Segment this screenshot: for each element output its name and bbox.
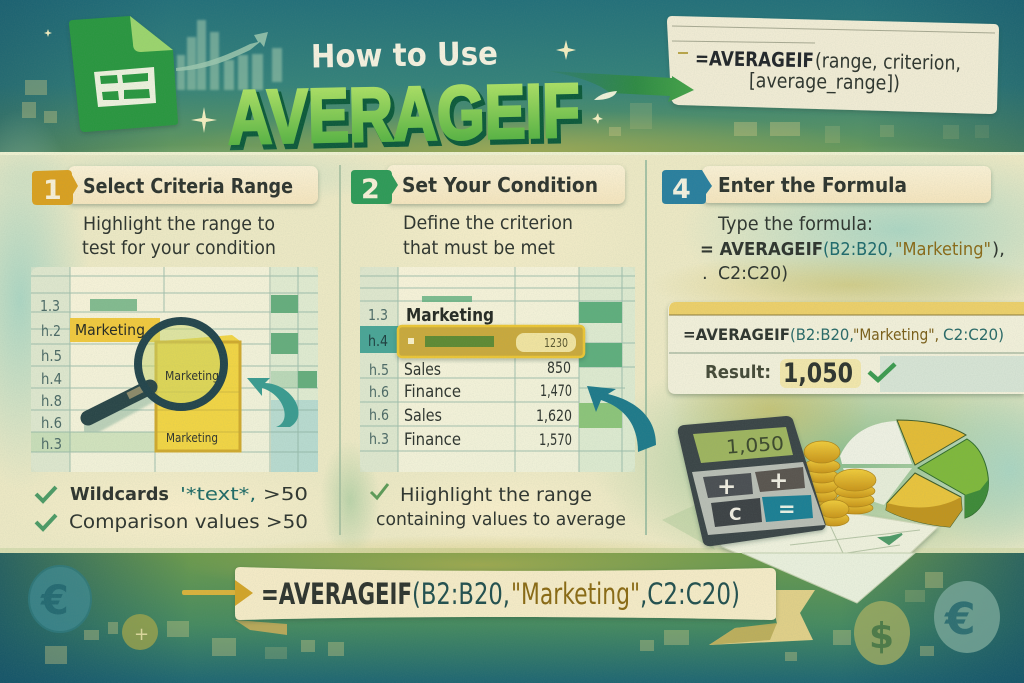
sheet page fold xyxy=(130,16,173,52)
calculator screen xyxy=(693,427,793,463)
Marketing cell text: Marketing xyxy=(75,321,145,339)
formula banner ribbon tails xyxy=(235,590,815,645)
step 1 checklist xyxy=(36,484,308,533)
coin: euro left xyxy=(29,566,91,632)
sheet table glyph xyxy=(94,67,156,107)
step 2 badge xyxy=(351,170,398,204)
step 4 description: . xyxy=(702,263,708,284)
formula banner xyxy=(235,567,776,620)
step 2 heading: Set Your Condition xyxy=(402,173,598,197)
syntax dash xyxy=(678,52,688,54)
row labels: h.6 xyxy=(369,406,389,424)
banner formula text: "Marketing" xyxy=(511,577,640,611)
dark teal curved arrow xyxy=(587,386,656,452)
step 2 spreadsheet illustration xyxy=(360,267,656,472)
step 4 badge xyxy=(662,170,712,204)
coin: dollar right xyxy=(854,601,910,665)
small leaf accent xyxy=(594,91,617,100)
footer background band xyxy=(0,535,1024,683)
category column: Sales xyxy=(404,406,442,426)
Marketing label: Marketing xyxy=(406,305,494,326)
checklist line 1: Hiighlight the range xyxy=(400,484,592,506)
magnifying glass xyxy=(88,321,224,428)
step 2 header xyxy=(351,165,625,205)
magnifier lens tint xyxy=(140,323,222,405)
values column: 1,570 xyxy=(539,430,572,449)
row labels: h.5 xyxy=(41,347,62,365)
column Marketing text: Marketing xyxy=(166,431,218,445)
row label h.4: h.4 xyxy=(368,332,388,350)
syntax line 1: =AVERAGEIF xyxy=(695,46,814,72)
formula in card: (B2:B20, xyxy=(790,325,854,344)
step 1 description xyxy=(82,213,276,259)
category column: Finance xyxy=(404,430,461,450)
step 1 heading: Select Criteria Range xyxy=(83,174,293,198)
category column xyxy=(404,360,461,450)
calculator keypad xyxy=(692,462,825,535)
highlighted condition row: 1230 xyxy=(544,336,568,350)
key plus xyxy=(703,473,753,500)
row labels: h.8 xyxy=(41,392,62,410)
row labels xyxy=(40,297,62,453)
title: AVERAGEIF: AVERAGEIF xyxy=(227,68,581,161)
step 4 heading: Enter the Formula xyxy=(718,173,907,197)
category column: Sales xyxy=(404,360,441,380)
step 2 description: Define the criterion xyxy=(403,212,573,234)
category column: Finance xyxy=(404,382,461,402)
step 4 description xyxy=(700,213,1005,284)
step 4 description: ), xyxy=(992,239,1005,260)
key clear: C xyxy=(729,505,741,525)
result value: 1,050 xyxy=(783,358,853,389)
teal curved arrow xyxy=(247,378,299,427)
step 1 badge xyxy=(32,170,78,205)
row labels: h.4 xyxy=(41,370,62,388)
wildcards values: '*text*, >50 xyxy=(180,484,308,505)
step 4 description: C2:C20) xyxy=(718,263,788,284)
paper sheet under calculator xyxy=(720,513,938,603)
row labels xyxy=(369,361,389,448)
yellow pointer arrow xyxy=(182,580,253,606)
main panel background xyxy=(0,110,1024,580)
comparison item: Comparison values >50 xyxy=(69,511,308,533)
decorative bar chart behind title xyxy=(177,20,282,90)
step 4 header xyxy=(662,166,991,205)
values column xyxy=(536,358,572,449)
row labels: h.5 xyxy=(369,361,389,379)
key equals: = xyxy=(778,497,796,521)
step 1 spreadsheet illustration xyxy=(31,267,318,472)
formula in card: "Marketing", xyxy=(853,325,939,344)
row label 1.3: 1.3 xyxy=(368,306,388,324)
coin: euro right: € xyxy=(944,594,976,645)
result label: Result: xyxy=(705,362,771,383)
row labels: h.6 xyxy=(41,414,62,432)
faint paper left of calculator xyxy=(662,505,715,550)
highlighted condition row xyxy=(398,326,584,357)
step 4 number: 4 xyxy=(672,174,691,205)
chart trend arrow xyxy=(176,32,268,71)
formula in card: =AVERAGEIF xyxy=(683,325,790,344)
pie chart xyxy=(840,420,988,527)
highlighted criteria column xyxy=(155,335,240,451)
key plus: + xyxy=(717,474,736,500)
calculator display value: 1,050 xyxy=(725,433,785,459)
check icon xyxy=(36,515,56,529)
result value pill xyxy=(780,359,861,388)
row labels: h.2 xyxy=(41,322,61,340)
step 4 description: Type the formula: xyxy=(717,213,873,235)
check icon xyxy=(371,484,388,498)
key clear xyxy=(711,498,762,527)
footer paper corner xyxy=(742,553,915,603)
coin: dollar right: $ xyxy=(869,616,894,657)
row labels: h.6 xyxy=(369,383,389,401)
values column: 850 xyxy=(547,358,571,377)
footer decorative squares xyxy=(45,572,943,664)
teal row label cell xyxy=(360,326,398,353)
values column: 1,470 xyxy=(540,381,572,400)
step 4 description: "Marketing" xyxy=(895,239,991,260)
row labels: h.3 xyxy=(369,430,389,448)
key plus: + xyxy=(769,468,788,494)
formula in card: C2:C20) xyxy=(943,325,1004,344)
title: How to Use: How to Use xyxy=(311,34,498,76)
sparkles xyxy=(44,29,603,133)
row labels: h.3 xyxy=(41,435,62,453)
checklist line 2: containing values to average xyxy=(376,509,626,530)
step 1 header xyxy=(32,166,318,206)
coin stacks xyxy=(804,441,876,526)
icon: Google Sheets document xyxy=(69,16,178,132)
banner formula text xyxy=(261,577,740,611)
result check xyxy=(869,364,895,380)
key plus xyxy=(755,467,805,494)
check icon xyxy=(36,487,56,501)
highlighted Marketing row xyxy=(70,318,160,342)
row labels: 1.3 xyxy=(40,297,60,315)
coin: euro left: € xyxy=(40,578,69,624)
step 2 description xyxy=(403,212,573,259)
title: AVERAGEIF: AVERAGEIF xyxy=(230,72,584,165)
syntax line 1: (range, criterion, xyxy=(815,48,961,75)
syntax line 1 xyxy=(695,46,961,75)
header decorative squares xyxy=(22,80,989,143)
coin: euro right xyxy=(934,581,1000,653)
green cell marks xyxy=(90,295,317,388)
coin: small left: + xyxy=(134,624,149,645)
key equals xyxy=(762,495,813,522)
header background band xyxy=(0,0,1024,190)
step 2 checklist xyxy=(371,484,626,530)
values column: 1,620 xyxy=(536,406,572,425)
step 2 description: that must be met xyxy=(403,237,555,259)
formula result card xyxy=(668,302,1024,394)
syntax line 2: [average_range]) xyxy=(749,68,900,95)
banner formula text: (B2:B20, xyxy=(412,577,510,611)
syntax callout box xyxy=(667,16,999,114)
step 1 description: test for your condition xyxy=(82,237,276,259)
coin: small left xyxy=(122,614,158,650)
step 2 number: 2 xyxy=(361,174,380,205)
formula in card xyxy=(683,325,1004,344)
arrow to callout xyxy=(548,71,694,102)
green cell marks xyxy=(422,296,622,428)
step 4 description: = AVERAGEIF xyxy=(700,239,823,260)
step 1 number: 1 xyxy=(43,175,62,206)
paper check mark xyxy=(880,534,902,544)
banner formula text: ,C2:C20) xyxy=(640,577,740,611)
calculator xyxy=(678,416,826,546)
wildcards item: Wildcards xyxy=(70,484,169,505)
step 4 description: (B2:B20, xyxy=(823,239,893,260)
banner formula text: =AVERAGEIF xyxy=(261,577,412,611)
step 1 description: Highlight the range to xyxy=(83,213,275,235)
lens Marketing text: Marketing xyxy=(165,369,219,383)
